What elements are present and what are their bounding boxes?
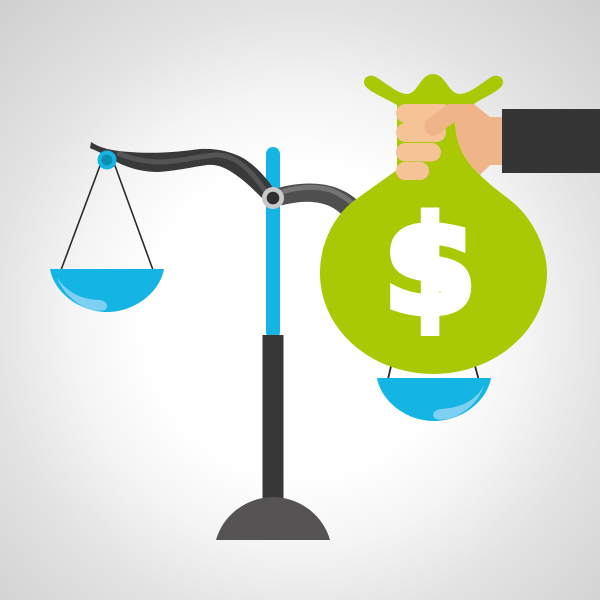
left pan strings [61,163,153,270]
right beam arm [278,183,358,216]
jacket sleeve [502,109,600,173]
dollar sign: $ [384,190,476,344]
left pivot [98,150,116,170]
palm and thumb [425,104,502,175]
money bag [320,74,547,374]
right pan strings [388,362,478,379]
scale pillar: blue [266,147,280,339]
fingers [396,104,452,180]
left pan [50,269,164,312]
left beam arm [90,142,275,199]
centre pivot [262,187,284,209]
hand [396,104,502,180]
scale pillar: dark [262,335,284,500]
scale base [216,497,330,540]
right pan [377,378,491,421]
